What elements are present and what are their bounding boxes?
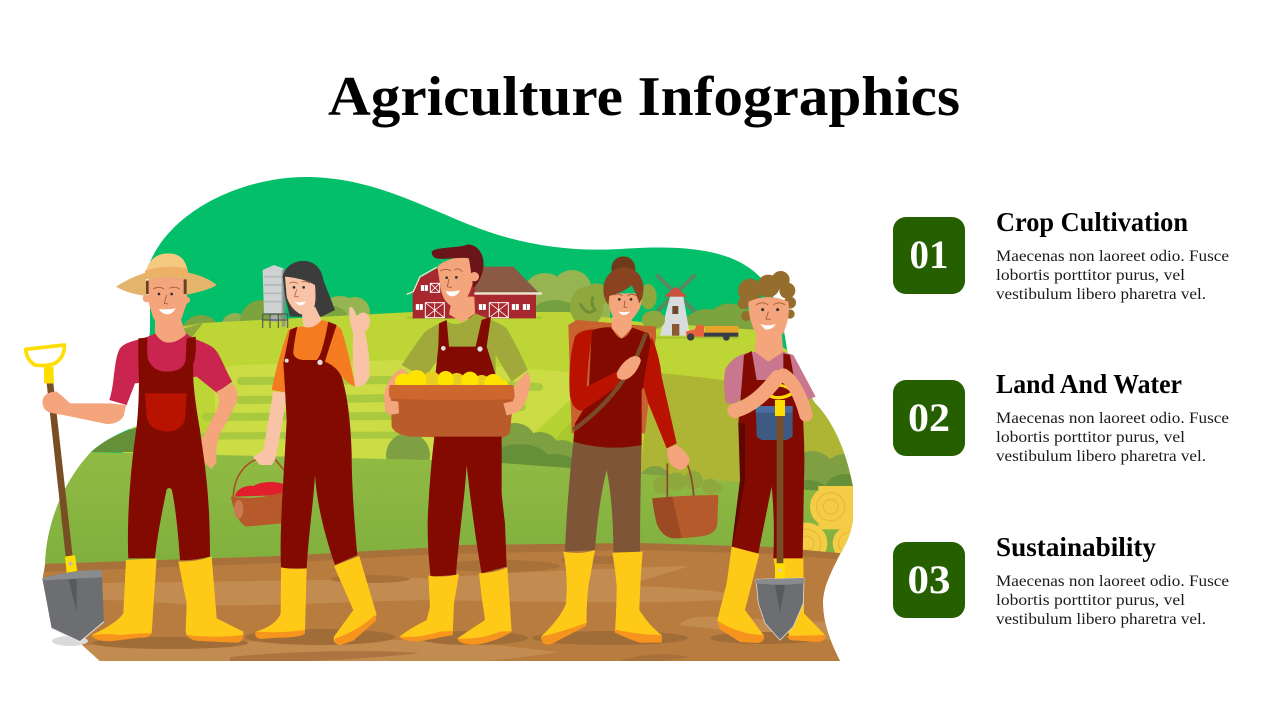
overalls	[281, 322, 357, 568]
description 03	[996, 573, 1229, 628]
person 5: woman with blue pocket and shovel	[717, 271, 825, 643]
person 1: man with straw hat and shovel	[26, 253, 243, 643]
truck	[657, 325, 738, 341]
description 03: Maecenas non laoreet odio. Fusce	[996, 573, 1229, 590]
shovel	[756, 385, 804, 640]
face details	[153, 287, 180, 314]
face	[285, 277, 316, 314]
description 01	[996, 248, 1229, 303]
illustration: farm landscape background	[30, 170, 869, 670]
lemons	[395, 370, 508, 393]
heading 01: Crop Cultivation	[996, 207, 1188, 237]
light green field	[122, 312, 853, 486]
face details	[614, 294, 637, 315]
item 01: crop cultivation	[893, 207, 1229, 303]
hand on basket	[667, 445, 690, 470]
hair sides	[145, 279, 187, 294]
shirt	[402, 313, 528, 382]
heading 02: Land And Water	[996, 369, 1182, 399]
curly hair	[738, 271, 796, 321]
description 02: Maecenas non laoreet odio. Fusce	[996, 410, 1229, 427]
face	[608, 293, 642, 324]
ears	[143, 294, 151, 302]
boots	[255, 567, 307, 638]
number 01: 01	[910, 232, 948, 277]
shirt	[109, 333, 232, 405]
olive field on the right	[641, 373, 853, 486]
number badge 01	[893, 217, 965, 294]
back boot	[773, 557, 825, 642]
lighter crop field	[215, 360, 570, 462]
description 01: lobortis porttitor purus, vel	[996, 267, 1186, 284]
left arm	[43, 392, 126, 424]
soil ground	[40, 543, 860, 670]
blue pocket	[756, 406, 793, 440]
arms and hands	[735, 375, 806, 415]
windmill blades	[657, 275, 695, 312]
arms	[384, 368, 410, 413]
description 02	[996, 410, 1229, 465]
heading 03: Sustainability	[996, 532, 1157, 562]
olive wedge at field edge	[184, 323, 203, 338]
neck	[155, 317, 187, 344]
description 03: lobortis porttitor purus, vel	[996, 592, 1186, 609]
person 2: woman with apple basket	[231, 261, 377, 645]
basket	[389, 385, 515, 439]
dark hill	[91, 428, 136, 452]
distant hills and bushes	[183, 270, 754, 330]
bun	[611, 256, 635, 280]
orange shirt	[272, 320, 355, 393]
hands on basket	[384, 400, 399, 415]
strap	[573, 333, 646, 430]
pink shirt	[724, 352, 816, 403]
item 03: sustainability	[893, 532, 1229, 628]
description 02: vestibulum libero pharetra vel.	[996, 448, 1206, 465]
overalls top	[435, 317, 496, 378]
hand on strap	[617, 356, 641, 380]
description 01: vestibulum libero pharetra vel.	[996, 286, 1206, 303]
head	[437, 255, 474, 307]
raised arm	[349, 307, 370, 387]
boots	[541, 550, 595, 644]
buttons	[285, 359, 289, 363]
windmill and truck	[657, 275, 738, 341]
barn	[407, 267, 542, 318]
description 01: Maecenas non laoreet odio. Fusce	[996, 248, 1229, 265]
description 02: lobortis porttitor purus, vel	[996, 429, 1186, 446]
hair	[432, 244, 484, 288]
shovel ground shadow	[52, 636, 88, 646]
hay bales	[802, 486, 853, 563]
silo	[263, 265, 288, 328]
description 03: vestibulum libero pharetra vel.	[996, 611, 1206, 628]
leaves in backpack	[570, 283, 665, 329]
apple basket	[231, 458, 285, 527]
item 02: land and water	[893, 369, 1229, 465]
sky	[30, 170, 860, 470]
hair	[283, 261, 335, 317]
right boot	[178, 557, 243, 643]
person 3: legs and boots	[399, 437, 512, 645]
hand on shovel	[43, 392, 70, 415]
trousers	[565, 442, 642, 553]
number badge 02	[893, 380, 965, 456]
overalls	[128, 337, 210, 560]
left arm	[253, 392, 287, 465]
hair	[603, 267, 643, 305]
neck	[449, 297, 475, 322]
number 02: 02	[908, 395, 950, 440]
face details	[289, 282, 310, 305]
head	[148, 277, 187, 326]
front boot	[717, 547, 764, 643]
ear	[470, 272, 479, 281]
neck	[755, 333, 783, 362]
right arm	[202, 383, 238, 469]
sleeves	[569, 329, 620, 411]
face details	[440, 269, 462, 296]
sweater	[573, 327, 654, 448]
diagonal field wedge	[530, 385, 585, 445]
neck	[302, 307, 322, 327]
person 3: man with lemon basket	[384, 244, 530, 439]
backpack	[568, 320, 656, 433]
vegetable basket	[652, 460, 723, 538]
person 4: woman with backpack and vegetable basket	[541, 256, 723, 645]
mid bushes	[386, 423, 853, 490]
overalls	[732, 351, 804, 558]
neck	[612, 317, 632, 338]
pocket	[145, 393, 187, 432]
title: Agriculture Infographics	[328, 66, 960, 128]
shovel	[26, 345, 104, 642]
head	[748, 297, 789, 342]
crop stripes	[203, 380, 539, 436]
number badge 03	[893, 542, 965, 618]
straw hat	[116, 253, 217, 296]
left boot	[92, 558, 157, 641]
number 03: 03	[908, 557, 950, 602]
face details	[756, 303, 785, 330]
lower green field	[40, 451, 860, 580]
